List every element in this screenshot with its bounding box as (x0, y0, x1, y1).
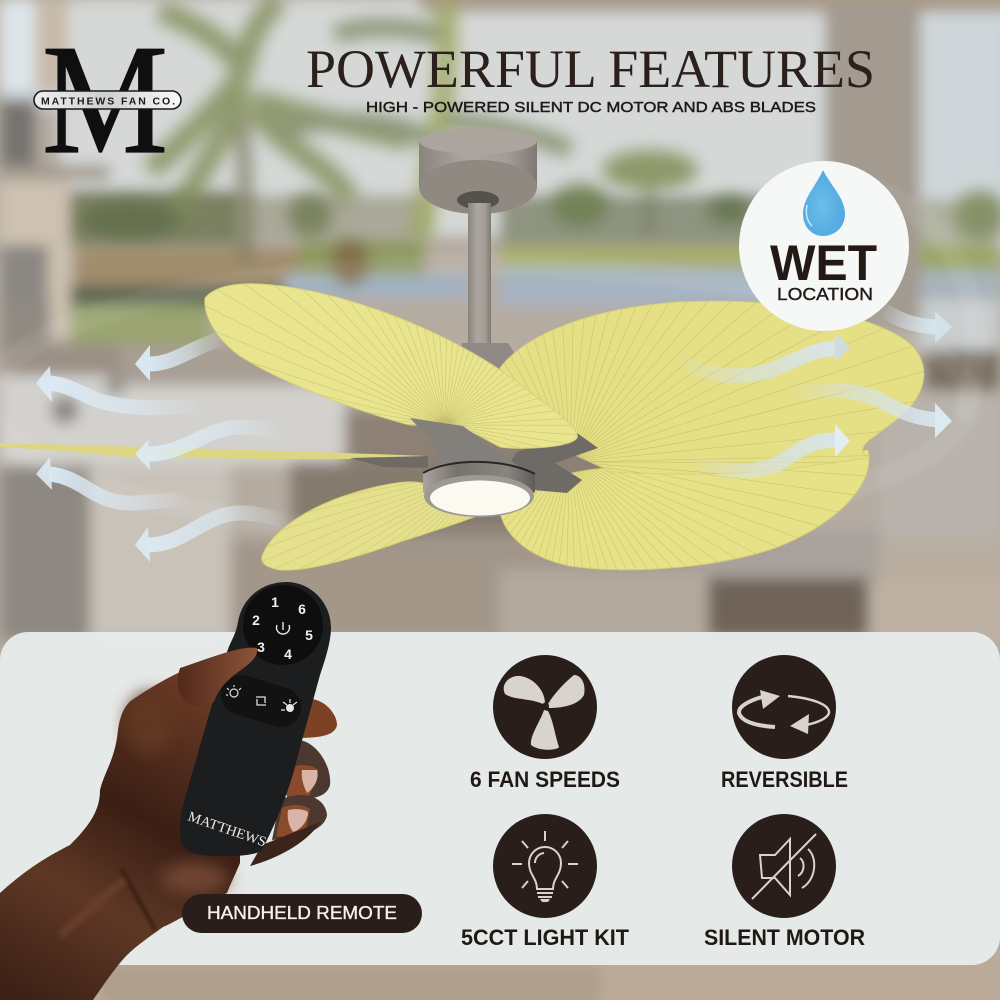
icon: fan (493, 655, 597, 759)
arrow right 4 (880, 308, 952, 343)
feature: reversible (721, 655, 848, 792)
blade upper left (204, 283, 578, 449)
arm and palm (0, 650, 258, 1000)
left fan arms (350, 418, 525, 470)
label: 6 FAN SPEEDS (470, 767, 620, 792)
wind arrows (36, 308, 952, 562)
remote brand text: MATTHEWS (186, 810, 268, 850)
location text: LOCATION (777, 284, 873, 304)
thin side blade (0, 443, 425, 459)
remote keypad numbers: 2 (252, 612, 260, 628)
arrow left 3 (135, 427, 285, 470)
icon: light bulb (493, 814, 597, 918)
blade upper right (500, 300, 924, 474)
logo name pill: MATTHEWS FAN CO. (41, 96, 175, 108)
arrow left 4 (36, 457, 190, 503)
icon: rotation arrows (732, 655, 836, 759)
fan motor and light (423, 460, 535, 517)
label: REVERSIBLE (721, 767, 848, 792)
wet text: WET (770, 235, 877, 291)
arrow left 2 (36, 366, 205, 408)
ceiling fan (0, 128, 924, 652)
label: handheld remote: HANDHELD REMOTE (207, 903, 397, 923)
blade lower right (500, 450, 870, 570)
logo name pill (34, 91, 181, 109)
label: SILENT MOTOR (704, 925, 865, 950)
remote dial (243, 585, 323, 665)
arrow right 1 (672, 332, 850, 376)
remote keypad numbers: 1 (271, 594, 279, 610)
icon: muted speaker (732, 814, 836, 918)
feature: 6 fan speeds (470, 655, 620, 792)
arrow right 2 (790, 390, 952, 438)
logo (34, 12, 181, 186)
arrow left 1 (135, 338, 225, 381)
feature: silent motor (704, 814, 865, 950)
arrow left 5 (135, 513, 285, 562)
feature: 5cct light kit (461, 814, 630, 950)
remote button strip (216, 670, 306, 732)
label: handheld remote (182, 894, 422, 933)
air swirl rings (0, 190, 976, 535)
wet location badge (739, 161, 909, 331)
remote cycle button (256, 697, 266, 705)
fan canopy (419, 128, 537, 214)
downrod (468, 203, 491, 350)
title: POWERFUL FEATURES (306, 39, 875, 99)
remote body (180, 582, 331, 856)
remote power icon (276, 622, 290, 634)
arrow right 3 (690, 424, 850, 471)
handheld remote in hand (0, 582, 337, 1000)
remote keypad numbers (252, 594, 313, 662)
logo monogram M: M (42, 12, 168, 186)
remote light-down button (226, 685, 241, 697)
blade lower left (261, 481, 476, 571)
right fan arms (505, 433, 598, 493)
remote keypad numbers: 6 (298, 601, 306, 617)
remote keypad numbers: 3 (257, 639, 265, 655)
icon: water drop (803, 170, 845, 236)
remote keypad numbers: 4 (284, 646, 292, 662)
remote light-up button (281, 699, 297, 712)
thumb (178, 648, 257, 707)
fingers behind remote (250, 699, 337, 866)
label: 5CCT LIGHT KIT (461, 925, 630, 950)
panel: features (0, 632, 1000, 965)
motor top (450, 343, 522, 400)
subtitle: HIGH - POWERED SILENT DC MOTOR AND ABS BLADES (366, 99, 816, 116)
remote keypad numbers: 5 (305, 627, 313, 643)
